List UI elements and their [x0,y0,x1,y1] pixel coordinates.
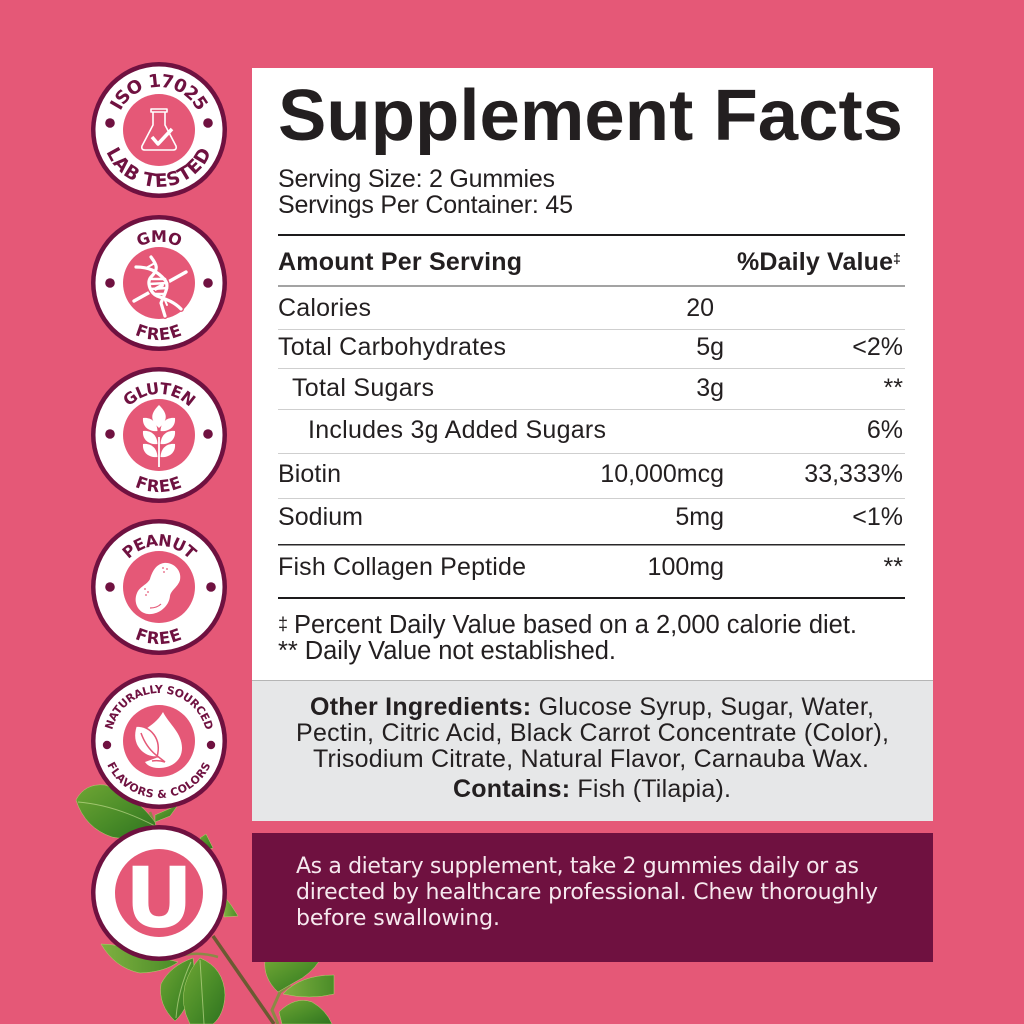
row: biotin: 33,333% [804,460,903,488]
serving information: Serving Size: 2 Gummies [278,165,555,193]
badge: gluten free: GLUTEN [124,382,196,406]
row: fish collagen peptide: ** [884,553,903,581]
panel: other ingredients [252,680,933,821]
icon: wheat [143,405,175,467]
badge: gluten free [91,367,227,503]
panel: directions: As a dietary supplement, take 2 gummies daily or as [296,854,859,879]
badge: GMO free [91,215,227,351]
row: calories [278,294,714,322]
botanical sprig with green leaves [76,785,334,1024]
row: total sugars: 3g [696,374,724,402]
row: sodium: Sodium [278,503,363,531]
footnotes: Percent Daily Value based on a 2,000 calorie diet. [294,611,857,639]
serving information [278,165,573,219]
badge: ISO 17025 lab tested: ISO 17025 [110,74,208,110]
panel: other ingredients: Trisodium Citrate, Natural Flavor, Carnauba Wax. [313,745,869,773]
row: total carbohydrates: 5g [696,333,724,361]
panel: supplement facts [252,68,933,680]
row: fish collagen peptide: 100mg [648,553,724,581]
panel: directions [252,833,933,962]
row: total sugars: Total Sugars [292,374,434,402]
table header [278,248,901,276]
row: calories: Calories [278,294,371,322]
table header: ‡ [893,250,901,266]
row: total carbohydrates: <2% [852,333,903,361]
icon: flask with check [142,109,176,150]
badge: ISO 17025 lab tested [91,62,227,198]
icon: peanut [136,563,180,614]
badge: peanut free: PEANUT [122,534,198,558]
serving information: Servings Per Container: 45 [278,191,573,219]
panel: directions: directed by healthcare professional. Chew thoroughly [296,880,878,905]
panel: other ingredients: Other Ingredients: Glucose Syrup, Sugar, Water, [310,693,874,721]
panel: other ingredients: Contains: Fish (Tilapia). [453,775,731,803]
footnotes [278,611,857,665]
badge: GMO free: GMO [137,230,182,246]
badge: peanut free [91,519,227,655]
row: added sugars: 6% [867,416,903,444]
row: calories: 20 [686,294,714,322]
badge: ISO 17025 lab tested: LAB TESTED [106,146,209,187]
icon: leaf and droplet [134,712,182,768]
badge: OU kosher mark: U [125,849,193,947]
table header: %Daily Value [737,248,893,276]
badge: OU kosher mark [91,825,227,961]
row: added sugars [308,416,903,444]
badge: naturally sourced flavors and colors: NATURALLY SOURCED [104,684,212,730]
panel: other ingredients: Pectin, Citric Acid, Black Carrot Concentrate (Color), [296,719,889,747]
badge: GMO free: FREE [136,324,182,340]
table header: Amount Per Serving [278,248,522,276]
panel: directions: before swallowing. [296,906,500,931]
badge: naturally sourced flavors and colors: FLAVORS & COLORS [108,762,210,798]
badge: peanut free: FREE [136,628,182,644]
row: sodium: <1% [852,503,903,531]
row: total sugars: ** [884,374,903,402]
row: biotin: Biotin [278,460,341,488]
row: total carbohydrates [278,333,903,361]
row: fish collagen peptide [278,553,903,581]
footnotes: ‡ [278,614,288,634]
row: sodium [278,503,903,531]
row: fish collagen peptide: Fish Collagen Peptide [278,553,526,581]
row: biotin [278,460,903,488]
footnotes: ** Daily Value not established. [278,637,616,665]
row: sodium: 5mg [675,503,724,531]
badge: gluten free: FREE [136,476,182,492]
row: total carbohydrates: Total Carbohydrates [278,333,506,361]
row: total sugars [292,374,903,402]
row: biotin: 10,000mcg [600,460,724,488]
icon: crossed DNA helix [134,257,186,316]
title: Supplement Facts [278,75,903,156]
row: added sugars: Includes 3g Added Sugars [308,416,606,444]
badge: naturally sourced flavors and colors [91,673,227,809]
